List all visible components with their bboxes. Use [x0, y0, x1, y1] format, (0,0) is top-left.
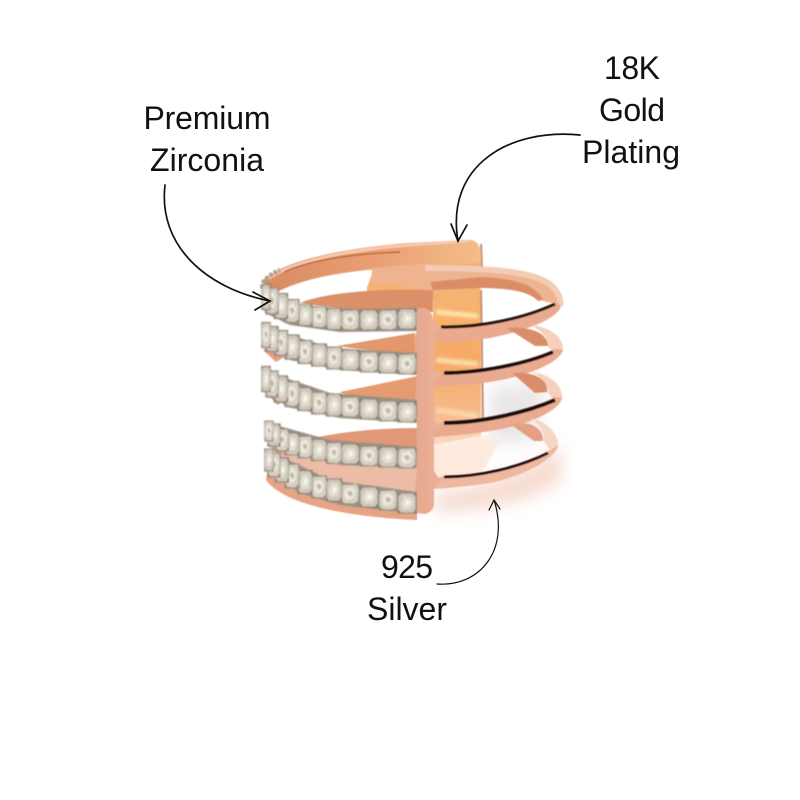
ring illustration [261, 240, 563, 520]
ring shadow [435, 382, 562, 512]
arrow: 18K Gold Plating [451, 134, 580, 241]
right hoop 4 [433, 418, 558, 489]
zirconia stone rows [261, 270, 417, 514]
label: 925 Silver: 925 [381, 549, 433, 585]
gold inner plate [367, 244, 483, 446]
label: 18K Gold Plating: 18K [604, 50, 660, 86]
stone row 5 [264, 448, 417, 514]
right hoop 1 [372, 264, 561, 343]
arrow: Premium Zirconia [164, 185, 270, 310]
label: Premium Zirconia: Zirconia [150, 142, 264, 178]
stone row 2 [261, 322, 417, 375]
right hoop 2 [433, 325, 563, 387]
label: Premium Zirconia: Premium [144, 100, 270, 136]
label: 18K Gold Plating [582, 50, 680, 170]
label: 18K Gold Plating: Plating [582, 134, 680, 170]
vertical connecting bar [414, 308, 441, 514]
label: 18K Gold Plating: Gold [599, 92, 665, 128]
bottom gap glow [433, 436, 500, 478]
arrow: 925 Silver [437, 500, 500, 584]
stone row 4 [264, 420, 417, 468]
stone row 3 [261, 366, 417, 423]
back top band [262, 240, 481, 293]
label: 925 Silver: Silver [367, 591, 447, 627]
label: 925 Silver [367, 549, 447, 627]
stone tip [263, 270, 280, 288]
right hoop 3 [433, 372, 562, 437]
stone row 1 [261, 284, 417, 332]
back band strips [263, 290, 433, 520]
label: Premium Zirconia [144, 100, 270, 178]
